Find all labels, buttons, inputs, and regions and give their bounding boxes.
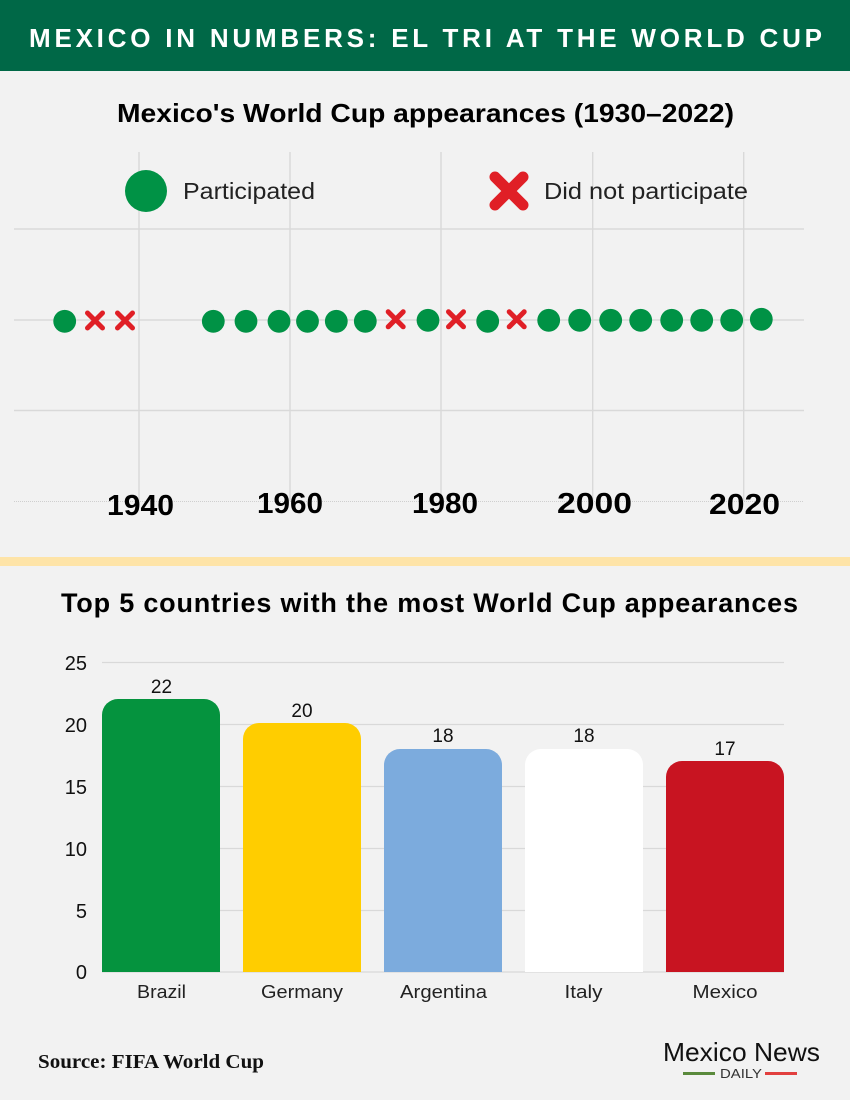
not participated markers bbox=[88, 312, 524, 328]
bar: Brazil bbox=[102, 677, 220, 1002]
bar: Italy bbox=[525, 726, 643, 1002]
bar: Argentina: Argentina bbox=[400, 982, 488, 1002]
bar: Argentina: 18 bbox=[432, 726, 454, 747]
heading: appearances timeline: Mexico's World Cup appearances (1930–2022) bbox=[117, 98, 734, 128]
legend: participated bbox=[125, 170, 315, 212]
timeline year labels: 1960 bbox=[257, 488, 323, 520]
title banner bbox=[0, 0, 850, 71]
y axis labels: 25 bbox=[65, 653, 87, 675]
legend: participated: Participated bbox=[183, 178, 315, 204]
bar: Germany bbox=[243, 701, 361, 1002]
bar: Argentina bbox=[384, 726, 502, 1002]
logo: Mexico News Daily bbox=[663, 1037, 820, 1081]
bar: Germany: Germany bbox=[261, 982, 343, 1002]
heading: top 5 countries: Top 5 countries with the most World Cup appearances bbox=[61, 588, 798, 618]
bar: Brazil: Brazil bbox=[137, 982, 186, 1002]
timeline year labels: 2000 bbox=[557, 488, 632, 520]
legend: did not participate bbox=[495, 177, 748, 205]
bar: Mexico bbox=[666, 739, 784, 1002]
timeline year labels: 1940 bbox=[107, 490, 174, 522]
logo: Mexico News Daily: Mexico News bbox=[663, 1037, 820, 1067]
bar: Germany: 20 bbox=[291, 701, 313, 722]
y axis labels: 10 bbox=[65, 839, 87, 861]
bar chart bbox=[65, 653, 784, 1002]
timeline year labels: 1980 bbox=[412, 488, 478, 520]
y axis labels bbox=[65, 653, 87, 984]
bar: Italy: Italy bbox=[564, 982, 602, 1002]
y axis labels: 5 bbox=[76, 901, 87, 923]
source note: Source: FIFA World Cup bbox=[38, 1051, 264, 1073]
logo: Mexico News Daily: DAILY bbox=[720, 1066, 762, 1081]
timeline year labels bbox=[107, 488, 780, 522]
y axis labels: 0 bbox=[76, 962, 87, 984]
bar: Brazil: 22 bbox=[151, 677, 172, 698]
title banner: MEXICO IN NUMBERS: EL TRI AT THE WORLD CUP bbox=[29, 23, 822, 53]
bar: Mexico: 17 bbox=[714, 739, 736, 760]
bar: Italy: 18 bbox=[573, 726, 595, 747]
y axis labels: 20 bbox=[65, 715, 87, 737]
timeline year labels: 2020 bbox=[709, 489, 780, 521]
timeline chart bbox=[14, 152, 804, 522]
bar: Mexico: Mexico bbox=[692, 982, 758, 1002]
participated markers bbox=[53, 308, 773, 333]
y axis labels: 15 bbox=[65, 777, 87, 799]
legend: did not participate: Did not participate bbox=[544, 178, 748, 204]
section divider bbox=[0, 557, 850, 566]
